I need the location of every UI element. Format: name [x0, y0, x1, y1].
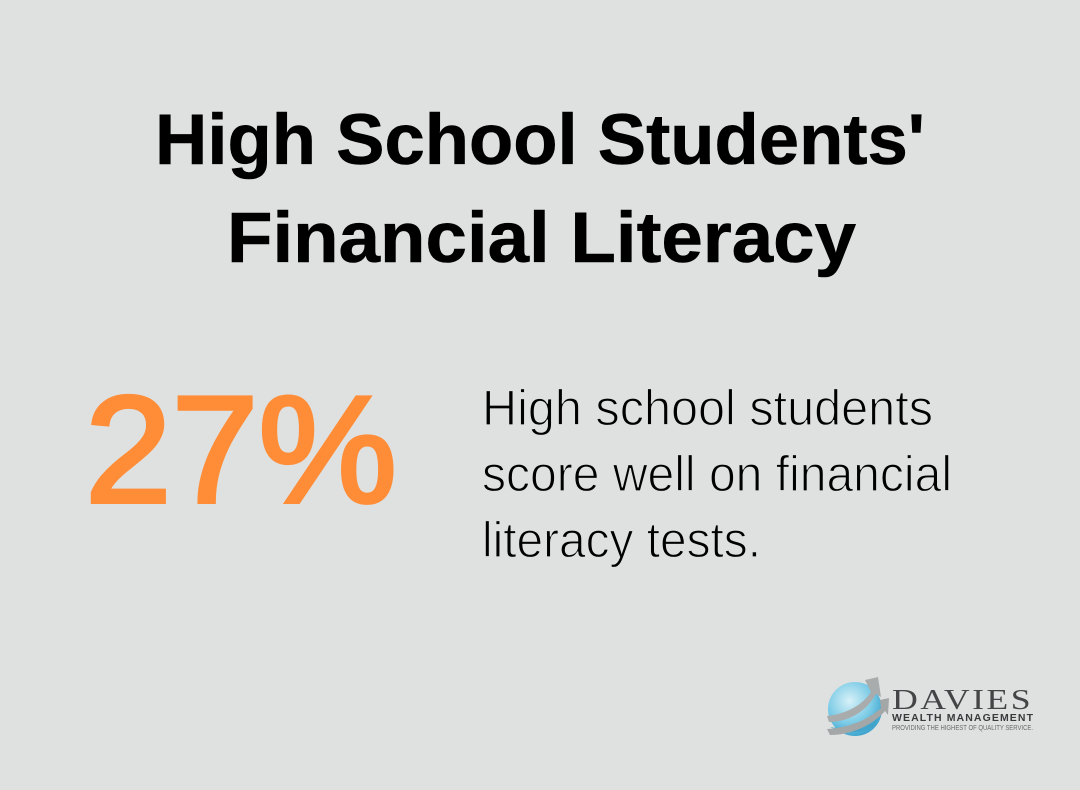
title: Financial Literacy	[227, 199, 857, 278]
logo subtitle: WEALTH MANAGEMENT	[892, 712, 1034, 724]
logo: Davies Wealth Management	[827, 677, 1034, 736]
icon: globe with arrows	[827, 677, 889, 736]
description text: High school students	[482, 380, 933, 436]
description text: score well on financial	[482, 446, 952, 502]
description text: literacy tests.	[482, 512, 761, 568]
title: High School Students'	[155, 101, 925, 180]
title	[155, 101, 925, 278]
statistic: 27%: 27%	[85, 365, 397, 535]
logo wordmark: DAVIES	[892, 684, 1033, 716]
logo tagline: PROVIDING THE HIGHEST OF QUALITY SERVICE.	[892, 725, 1033, 732]
description text	[482, 380, 952, 568]
